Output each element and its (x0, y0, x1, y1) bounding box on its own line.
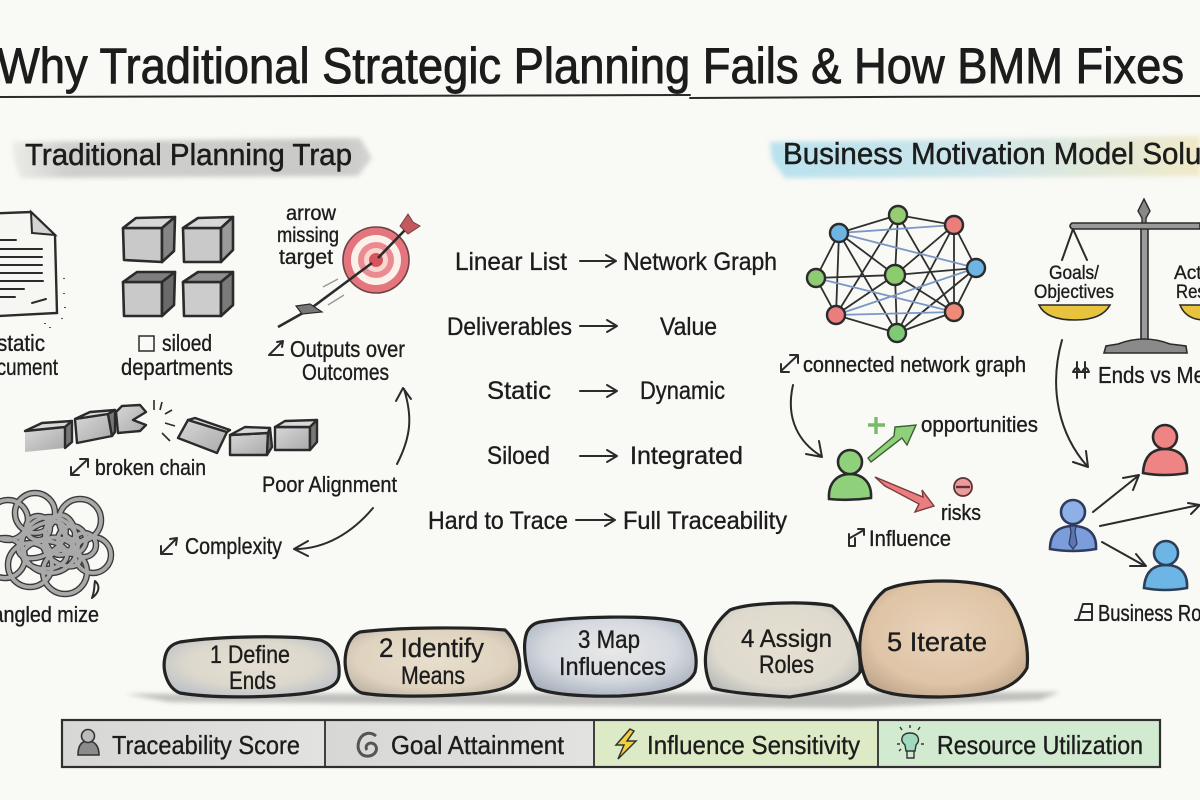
stone 3: map influences: 3 Map (578, 626, 640, 654)
icon: target with arrow (278, 214, 420, 327)
icon: blue role (1144, 541, 1187, 590)
row: hard to trace to full traceability (428, 507, 787, 535)
stone 4: assign roles: Roles (759, 651, 814, 679)
panel: stepping stones (125, 581, 1060, 708)
label: arrow missing target: missing (277, 224, 339, 247)
panel: comparison list (428, 248, 787, 535)
stone 2: identify means: 2 Identify (379, 633, 484, 663)
icon: red role (1143, 425, 1187, 475)
label: connected network graph: connected network graph (803, 352, 1026, 377)
row: static to dynamic (487, 377, 725, 405)
label: arrow missing target: arrow (286, 202, 337, 225)
row: siloed to integrated: Siloed (487, 442, 550, 470)
row: deliverables to value (447, 313, 717, 341)
metric: goal attainment: Goal Attainment (391, 730, 565, 760)
icon: static document (0, 212, 65, 328)
label: influence: Influence (869, 526, 951, 551)
label: siloed departments: departments (121, 354, 233, 380)
panel: traditional planning trap (0, 137, 420, 627)
metric: resource utilization: Resource Utilization (937, 730, 1143, 760)
stone 3: map influences: Influences (559, 653, 666, 681)
icon: scale ends vs means (1034, 199, 1200, 353)
stone 3: map influences (525, 617, 696, 696)
icon: broken chain (25, 400, 317, 455)
label: broken chain: broken chain (95, 455, 206, 480)
stone 1: define ends: Ends (229, 667, 276, 695)
label: siloed departments (121, 330, 233, 380)
row: deliverables to value: Deliverables (447, 313, 572, 341)
icon: tangled maze (0, 493, 111, 598)
ground shadow (125, 692, 1060, 708)
stone 2: identify means (345, 628, 520, 696)
stone 2: identify means: Means (401, 662, 465, 690)
icon: scale ends vs means: Goals/ (1049, 263, 1100, 284)
row: static to dynamic: Dynamic (640, 377, 725, 405)
arrow: opportunities (868, 417, 916, 462)
arrow: risks (875, 477, 972, 512)
label: risks: risks (941, 500, 981, 525)
stone 4: assign roles: 4 Assign (741, 625, 832, 653)
stone 1: define ends (164, 637, 339, 697)
label: arrow missing target: target (279, 246, 333, 269)
label: poor alignment: Poor Alignment (262, 472, 397, 497)
stone 5: iterate (860, 581, 1027, 697)
label: arrow missing target (277, 202, 339, 269)
label: opportunities: opportunities (921, 412, 1038, 437)
stone 1: define ends: 1 Define (210, 641, 290, 669)
row: static to dynamic: Static (487, 377, 551, 405)
row: linear list to network graph (455, 248, 777, 276)
label: outputs over outcomes: Outcomes (302, 359, 389, 385)
row: siloed to integrated (487, 442, 743, 470)
label: complexity: Complexity (185, 533, 282, 559)
arrow: alignment to outputs (396, 388, 411, 464)
arrow: scale to business roles (1056, 340, 1088, 467)
stone 5: iterate: 5 Iterate (887, 627, 987, 657)
panel: business motivation model solution (770, 136, 1200, 626)
icon: connected network graph (807, 206, 985, 342)
arrow: alignment to complexity (294, 508, 373, 556)
row: hard to trace to full traceability: Full Traceability (623, 507, 787, 535)
metric: influence sensitivity: Influence Sensitivity (647, 730, 860, 760)
label: static document (0, 330, 58, 380)
label: outputs over outcomes: Outputs over (290, 336, 405, 362)
metric: traceability score: Traceability Score (112, 730, 300, 760)
label: siloed departments: siloed (162, 330, 212, 356)
panel: metrics bar (62, 720, 1160, 767)
row: linear list to network graph: Network Graph (623, 248, 777, 276)
row: deliverables to value: Value (660, 313, 717, 341)
heading: traditional planning trap: Traditional Planning Trap (25, 137, 352, 172)
icon: scale ends vs means: Objectives (1034, 282, 1114, 303)
label: outputs over outcomes (269, 336, 405, 385)
metric: resource utilization (897, 725, 1143, 760)
arrow: network to influence (791, 385, 822, 457)
row: hard to trace to full traceability: Hard to Trace (428, 507, 568, 535)
row: linear list to network graph: Linear List (455, 248, 567, 276)
icon: manager (1050, 500, 1096, 551)
row: siloed to integrated: Integrated (630, 442, 743, 470)
icon: influence person (829, 450, 871, 500)
icon: business roles people (1050, 425, 1200, 590)
stone 4: assign roles (705, 603, 860, 697)
icon: siloed cubes (123, 217, 233, 316)
arrows: assignments (1093, 475, 1200, 566)
